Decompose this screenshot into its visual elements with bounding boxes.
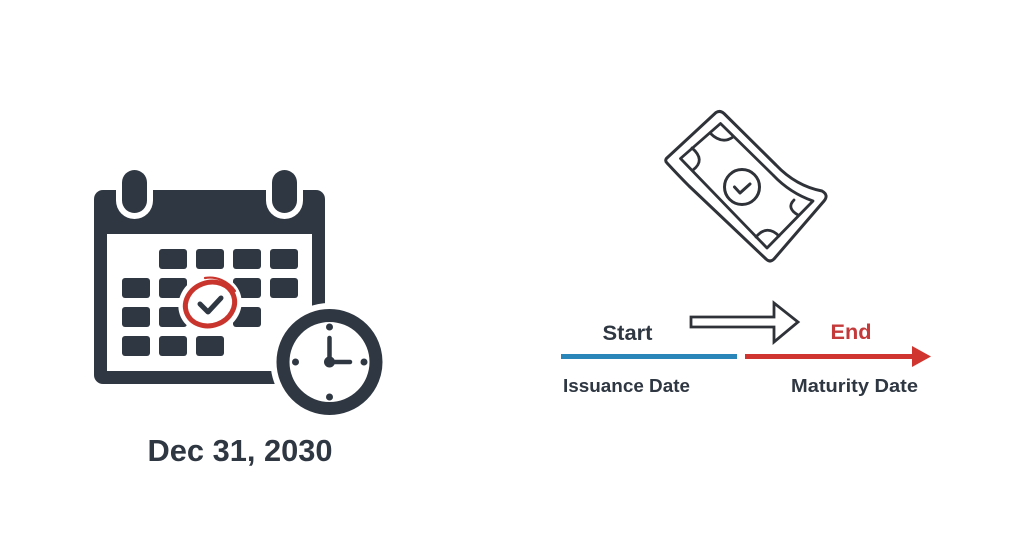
bill corner arcs [692, 133, 798, 237]
clock [270, 303, 388, 421]
date label: Dec 31, 2030 [148, 434, 332, 468]
start label: Start [602, 322, 652, 345]
timeline [561, 303, 931, 396]
blue start line [561, 354, 737, 359]
red circled check mark [170, 266, 250, 342]
red end arrow [745, 346, 931, 367]
bill outer outline [666, 111, 826, 261]
icon: calendar with clock [94, 160, 388, 421]
check badge [724, 170, 760, 204]
calendar body [94, 190, 325, 384]
bill inner outline [680, 124, 813, 248]
maturity date label: Maturity Date [791, 375, 918, 396]
issuance date label: Issuance Date [563, 375, 690, 396]
calendar date cells [122, 249, 298, 356]
calendar rings [116, 160, 303, 219]
icon: dollar bill with check mark [666, 111, 826, 261]
outlined direction arrow [691, 303, 798, 342]
end label: End [830, 320, 872, 344]
